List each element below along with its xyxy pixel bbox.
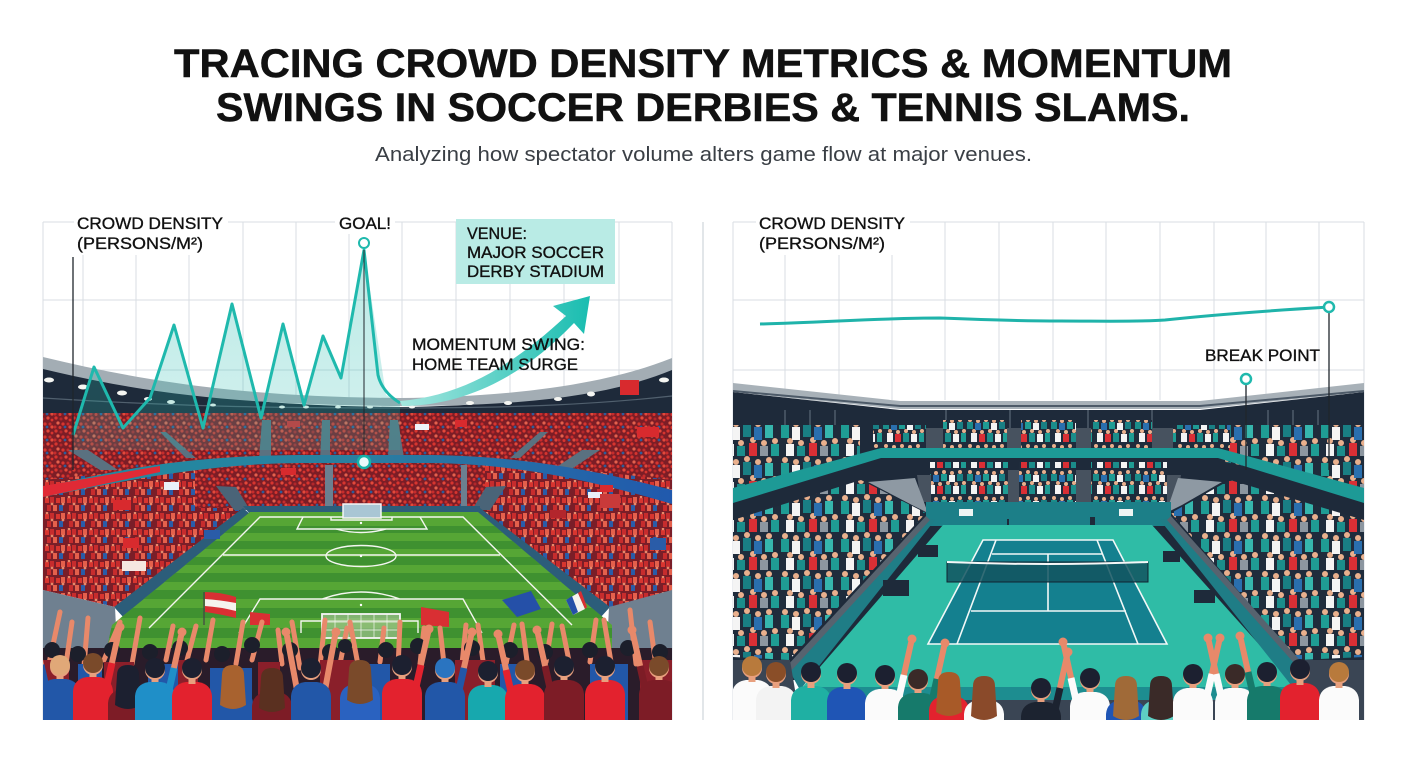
title	[174, 42, 1232, 130]
momentum arrow	[400, 296, 590, 406]
label: crowd density: CROWD DENSITY	[759, 214, 905, 233]
goal marker line	[363, 250, 365, 462]
tennis net	[947, 562, 1148, 582]
lower centre crowds	[917, 462, 1181, 502]
back wall with boards	[926, 502, 1171, 526]
chart area fill	[73, 250, 400, 450]
callout: venue: MAJOR SOCCER	[467, 243, 604, 262]
goal marker top	[359, 238, 369, 248]
line chart: soccer crowd density	[73, 238, 590, 470]
upper stand aisles	[68, 420, 600, 470]
floor strip	[733, 660, 1364, 720]
foreground crowd: front row fans	[43, 623, 672, 720]
pitch	[108, 512, 612, 648]
near goal	[322, 614, 400, 638]
divider	[702, 222, 704, 720]
upper stand crowds	[733, 420, 1364, 490]
panel: soccer derby	[28, 214, 679, 742]
callout: venue: DERBY STADIUM	[467, 262, 604, 281]
tennis stadium illustration	[732, 383, 1364, 752]
court-side benches	[883, 545, 1215, 603]
stand ring band	[43, 455, 672, 504]
chart line	[73, 250, 400, 435]
subtitle: Analyzing how spectator volume alters game flow at major venues.	[375, 144, 1032, 166]
side walls	[789, 518, 935, 690]
pitch-side flags	[204, 591, 587, 627]
upper stand crowd	[43, 413, 672, 480]
teal ledge	[733, 448, 1364, 503]
lower stand crowd	[43, 460, 672, 607]
label: crowd density	[756, 214, 910, 255]
label: crowd density: (PERSONS/M²)	[759, 234, 885, 253]
chart grid: soccer	[43, 222, 672, 720]
label: momentum swing: MOMENTUM SWING:	[412, 335, 585, 354]
marker: end of line	[1324, 302, 1334, 470]
far goal	[343, 504, 381, 518]
side stand crowds	[733, 478, 1364, 660]
stadium illustration	[28, 357, 679, 742]
callout: venue: VENUE:	[467, 224, 527, 243]
title: TRACING CROWD DENSITY METRICS & MOMENTUM	[174, 42, 1232, 86]
label: goal: GOAL!	[339, 214, 391, 233]
label: break point: BREAK POINT	[1205, 346, 1320, 365]
goal marker bottom	[358, 456, 370, 468]
label: crowd density: (PERSONS/M²)	[77, 234, 203, 253]
chart grid: tennis	[733, 222, 1364, 720]
callout: venue	[456, 219, 615, 284]
line chart: tennis crowd density	[760, 307, 1329, 324]
label: crowd density: CROWD DENSITY	[77, 214, 223, 233]
flags in stands	[113, 380, 666, 571]
court surround	[800, 525, 1300, 690]
roof	[43, 357, 672, 413]
tennis court	[928, 540, 1167, 644]
panel: tennis slam	[732, 214, 1364, 752]
foreground crowd: back row with raised arms	[43, 610, 672, 720]
foreground fans	[733, 632, 1359, 720]
pitch markings	[149, 517, 572, 633]
roof and dark stand background	[733, 383, 1364, 680]
label: crowd density	[74, 214, 228, 255]
perimeter walls	[243, 506, 480, 513]
axis marker line	[72, 257, 74, 470]
title: SWINGS IN SOCCER DERBIES & TENNIS SLAMS.	[216, 86, 1190, 130]
label: momentum swing: HOME TEAM SURGE	[412, 355, 578, 374]
label: momentum swing	[412, 335, 585, 374]
marker: break point	[1241, 374, 1251, 470]
